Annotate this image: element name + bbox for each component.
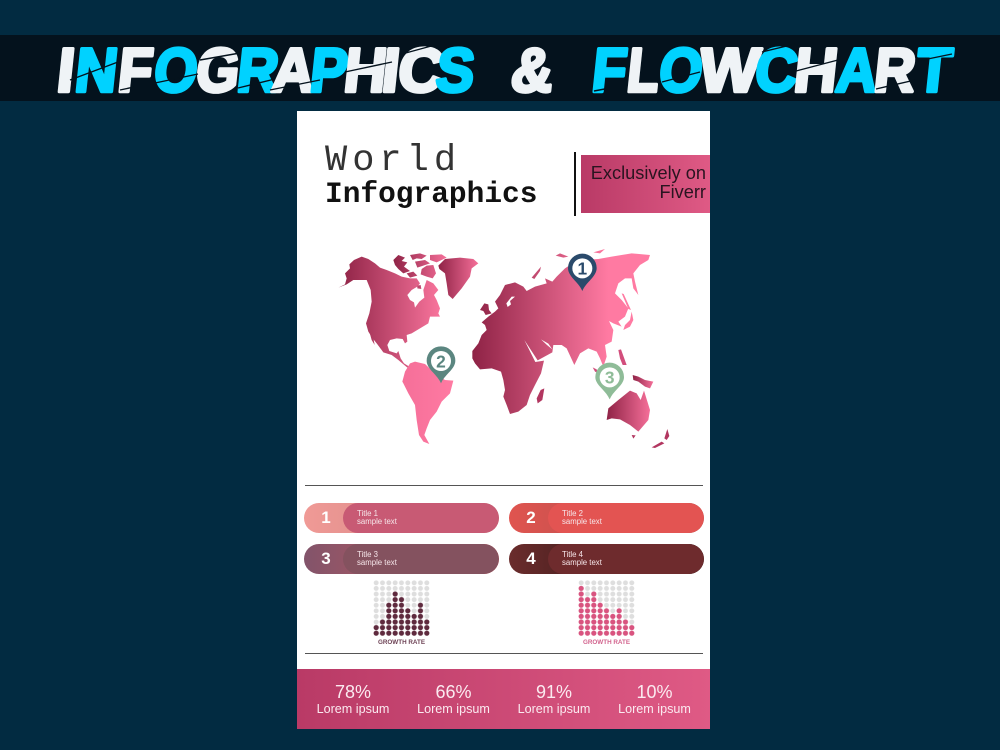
stat 10%: Lorem ipsum [618, 702, 691, 716]
stat 10% [618, 682, 691, 716]
vertical divider [574, 152, 576, 216]
pin 2: 2 [436, 351, 446, 371]
pin 1 [568, 254, 597, 291]
pill 4: sample text [562, 558, 602, 567]
stat 10%: 10% [636, 682, 673, 702]
rule bottom [305, 653, 703, 654]
rule top [305, 485, 703, 486]
dot chart right label: GROWTH RATE [583, 639, 630, 646]
pill 4: 4 [526, 549, 536, 568]
heading: World: World [325, 140, 461, 182]
South America [402, 362, 453, 444]
pin 3 [595, 363, 624, 399]
North America [338, 253, 478, 368]
banner title [54, 37, 955, 101]
Madagascar [537, 388, 544, 403]
dot chart left label: GROWTH RATE [378, 639, 425, 646]
pin 2 [427, 346, 455, 383]
Oceania [593, 349, 669, 448]
pill 2: sample text [562, 516, 602, 526]
heading: Infographics: Infographics [325, 177, 537, 211]
world map [338, 249, 670, 448]
Asian islands [480, 249, 633, 330]
stats band [297, 669, 710, 729]
stat 66%: Lorem ipsum [417, 702, 490, 716]
dot chart left [374, 580, 430, 636]
pill 4: Title 4 [562, 550, 583, 559]
stat 78% [317, 682, 389, 716]
pill 1: sample text [357, 516, 397, 526]
white poster panel [297, 111, 710, 729]
exclusive tag [581, 155, 710, 213]
pill 4 [509, 544, 704, 574]
stat 66% [417, 682, 490, 716]
stat 91% [518, 682, 590, 716]
dot chart right [578, 580, 634, 636]
banner band [0, 35, 1000, 101]
pill 3 [304, 544, 499, 574]
pill 1 [304, 502, 499, 532]
pill 3: 3 [321, 549, 331, 568]
stat 66%: 66% [435, 682, 472, 702]
pin 3: 3 [605, 368, 615, 388]
pill 1: 1 [321, 508, 331, 526]
Eurasia and Africa [472, 249, 650, 414]
pill 3: Title 3 [357, 550, 378, 559]
pill 2 [509, 502, 704, 532]
pin 1: 1 [578, 259, 588, 279]
stat 91%: Lorem ipsum [518, 702, 590, 716]
stat 78%: Lorem ipsum [317, 702, 389, 716]
pill 1: Title 1 [357, 508, 378, 518]
stat 78%: 78% [335, 682, 371, 702]
exclusive tag: Fiverr [660, 182, 706, 202]
inland seas [506, 297, 552, 349]
exclusive tag: Exclusively on [591, 163, 706, 183]
pill 2: 2 [526, 508, 536, 526]
pill 2: Title 2 [562, 508, 583, 518]
pill 3: sample text [357, 558, 397, 567]
stat 91%: 91% [536, 682, 572, 702]
